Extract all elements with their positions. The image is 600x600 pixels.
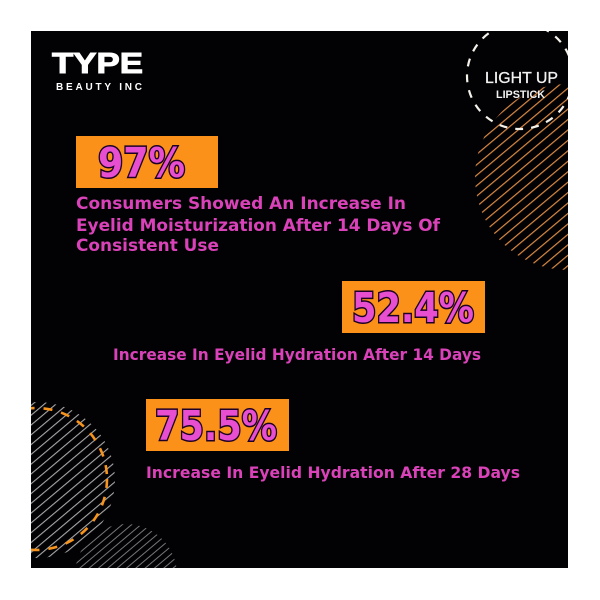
logo: TYPE Beauty Inc xyxy=(52,48,143,93)
value: 52.4% xyxy=(352,284,474,332)
badge: Light Up Lipstick xyxy=(485,70,558,101)
line 3: Consistent Use xyxy=(76,236,219,256)
hatched circle: bottom left xyxy=(31,402,115,558)
stat 52.4% xyxy=(342,281,485,333)
orange box xyxy=(342,281,485,333)
orange box xyxy=(146,399,289,451)
stat 97% xyxy=(76,136,218,188)
description 52.4%: Increase In Eyelid Hydration After 14 Days xyxy=(113,345,481,364)
logo wordmark: TYPE xyxy=(52,48,143,80)
description 97% xyxy=(76,194,441,256)
hatched circle: top right xyxy=(475,84,568,270)
description 75.5%: Increase In Eyelid Hydration After 28 Days xyxy=(146,463,520,482)
logo subtitle: BEAUTY INC xyxy=(56,82,142,93)
dashed circle: top right xyxy=(467,23,573,129)
badge subtitle: LIPSTICK xyxy=(496,89,545,101)
value: 75.5% xyxy=(155,402,277,450)
badge title: LIGHT UP xyxy=(485,70,558,87)
hatched circle: bottom xyxy=(76,524,176,568)
line 2: Eyelid Moisturization After 14 Days Of xyxy=(76,216,441,236)
dashed circle: bottom left xyxy=(31,406,108,552)
value: 97% xyxy=(98,139,185,187)
orange box xyxy=(76,136,218,188)
line 1: Consumers Showed An Increase In xyxy=(76,194,406,214)
stat 75.5% xyxy=(146,399,289,451)
